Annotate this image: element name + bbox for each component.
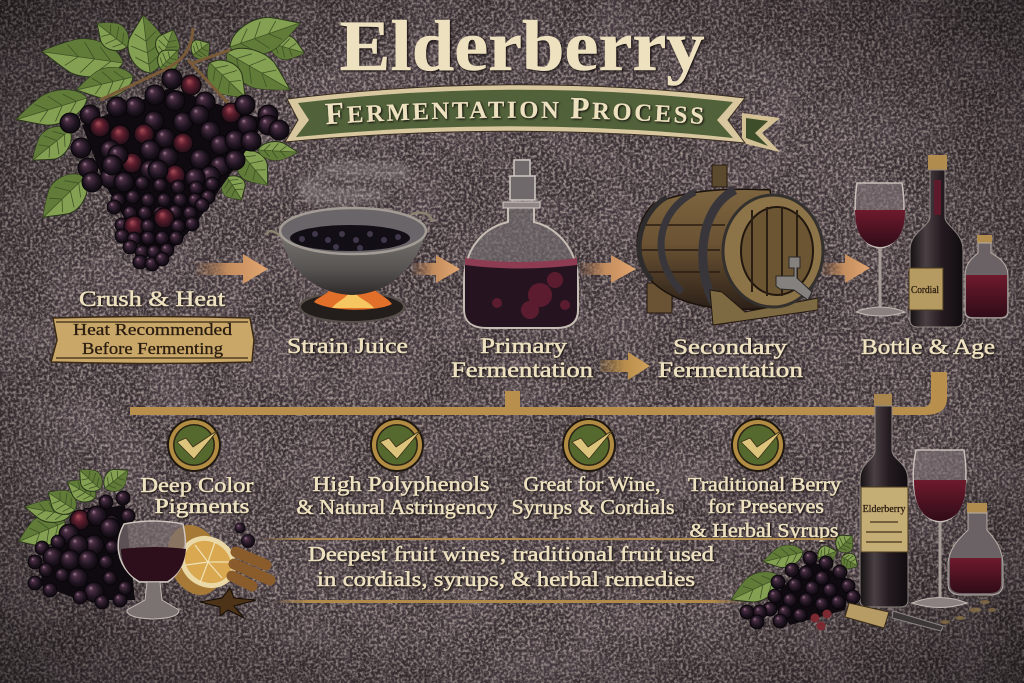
connector line [130, 372, 947, 415]
benefit: Traditional Berry [688, 418, 841, 542]
illustration: labelled bottle, glass, small bottle, berries [725, 394, 1003, 631]
step 3 label: Primary Fermentation: Primary [480, 333, 567, 358]
title: Elderberry [340, 6, 704, 86]
arrow: crush to strain [196, 254, 268, 284]
citrus [158, 517, 232, 603]
parchment note: Heat Recommended [73, 320, 233, 339]
berries [60, 69, 289, 271]
parchment note [51, 316, 254, 364]
benefit: Great for Wine [512, 418, 674, 519]
stems [100, 28, 240, 116]
benefit: High Polyphenols: & Natural Astringency [296, 495, 498, 519]
benefit: Deep Color Pigments: Deep Color [140, 473, 254, 497]
benefit: Great for Wine: Syrups & Cordials [512, 495, 674, 519]
step 5 label: Bottle & Age: Bottle & Age [861, 334, 995, 359]
benefit: Great for Wine: Great for Wine, [524, 472, 660, 496]
arrow: primary to secondary lower [600, 352, 650, 380]
step 3 label: Primary Fermentation: Fermentation [451, 357, 593, 382]
leaves [12, 6, 308, 230]
step 4 label: Secondary Fermentation: Fermentation [658, 357, 803, 382]
arrow: strain to primary [412, 255, 460, 283]
corkscrew [892, 611, 943, 631]
pebbles [940, 600, 996, 624]
small red berries [810, 610, 832, 630]
icon: check badge [167, 418, 221, 472]
icon: pot over fire with steam [267, 160, 432, 322]
icon: wooden barrel [637, 165, 823, 325]
benefit: High Polyphenols: High Polyphenols [312, 472, 490, 496]
benefit: Deep Color Pigments: Pigments [154, 494, 250, 518]
step 1 label: Crush & Heat: Crush & Heat [79, 286, 225, 311]
step 3 label: Primary Fermentation [451, 333, 593, 382]
summary text with rules: in cordials, syrups, & herbal remedies [317, 567, 695, 591]
benefit: Traditional Berry: for Preserves [708, 496, 824, 518]
icon: check badge [731, 418, 785, 472]
arrow: secondary to bottle [822, 254, 870, 283]
steam [296, 160, 412, 204]
ribbon banner [284, 84, 780, 152]
benefit: High Polyphenols [296, 418, 498, 519]
summary text with rules: Deepest fruit wines, traditional fruit used [308, 542, 715, 566]
star anise [200, 588, 256, 618]
arrow: primary to secondary top [580, 255, 636, 283]
small berries [234, 522, 255, 548]
benefit: Traditional Berry: Traditional Berry [688, 474, 841, 496]
summary text with rules [258, 538, 860, 603]
cluster shadow [82, 88, 265, 262]
grape cluster illustration [12, 6, 308, 271]
step 4 label: Secondary Fermentation [658, 334, 803, 382]
icon: wine glass, bottle and small bottle [855, 155, 1008, 327]
icon: wine glass, bottle and small bottle: Cordial [911, 285, 939, 296]
step 4 label: Secondary Fermentation: Secondary [673, 334, 787, 359]
rear cradle leg [647, 283, 672, 313]
benefit: Deep Color Pigments [140, 418, 254, 518]
parchment note: Before Fermenting [82, 339, 224, 358]
icon: glass carboy [464, 160, 578, 328]
cork [845, 603, 889, 628]
ribbon text: FERMENTATION PROCESS [325, 98, 705, 126]
illustration: labelled bottle, glass, small bottle, berries: Elderberry [862, 503, 906, 515]
illustration: berries, glass, citrus and spices [13, 462, 270, 619]
benefit: Traditional Berry: & Herbal Syrups [690, 520, 839, 542]
cinnamon [232, 552, 270, 586]
icon: check badge [562, 418, 616, 472]
icon: check badge [370, 418, 424, 472]
step 2 label: Strain Juice: Strain Juice [287, 333, 408, 358]
spigot [776, 257, 812, 300]
wine glass [118, 521, 185, 582]
